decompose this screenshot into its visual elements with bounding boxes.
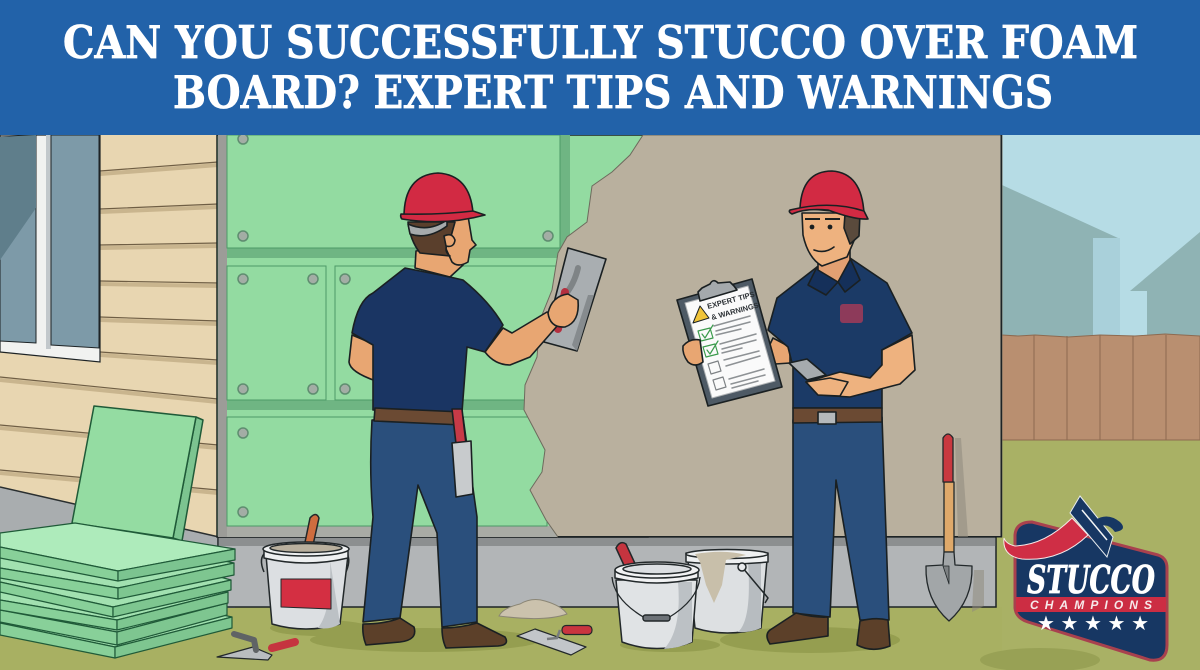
- neck: [818, 245, 850, 282]
- badge: [1015, 522, 1167, 660]
- front bucket with trowel handle: [612, 543, 700, 649]
- left arm: [349, 335, 376, 381]
- wooden fence: [1002, 334, 1200, 440]
- red swoosh: [1004, 518, 1088, 559]
- trowel mark: [1070, 496, 1123, 557]
- title text: BOARD? EXPERT TIPS AND WARNINGS: [173, 66, 1053, 119]
- hair: [844, 214, 860, 244]
- pants and boots: [767, 417, 890, 649]
- hand trowel left: [217, 634, 295, 660]
- right arm: [485, 312, 562, 365]
- window: [0, 135, 100, 362]
- eyes and mouth: [805, 218, 840, 229]
- logo: Stucco Champions: [1004, 496, 1167, 660]
- CHAMPIONS wordmark: CHAMPIONS: [1030, 598, 1152, 612]
- title text: [63, 16, 1138, 119]
- house siding: [0, 135, 235, 608]
- red band: [1016, 597, 1166, 612]
- checklist: [698, 316, 765, 390]
- polo shirt back: [352, 268, 503, 412]
- shovel shadow: [955, 438, 984, 612]
- face: [802, 213, 856, 266]
- pants and shoes: [363, 417, 506, 648]
- clipboard heading: & WARNINGS: [710, 301, 760, 322]
- clipboard heading: [706, 290, 760, 322]
- hard hat: [401, 173, 485, 222]
- stacked foam boards: [0, 523, 235, 658]
- worker plastering the wall: [349, 173, 606, 648]
- hand: [548, 294, 578, 327]
- raised arm: [760, 338, 790, 365]
- leaning foam board: [72, 406, 203, 541]
- stucco coat: [524, 135, 1002, 537]
- clipboard heading: EXPERT TIPS: [706, 290, 756, 311]
- tool belt: [374, 408, 462, 425]
- ear: [444, 235, 455, 246]
- neck: [415, 245, 463, 277]
- back bucket with drips: [686, 550, 768, 633]
- collar: [808, 258, 860, 295]
- belt: [793, 408, 882, 424]
- bucket with trowel handle: [261, 514, 349, 629]
- hair: [408, 222, 455, 256]
- belt trowel: [452, 409, 473, 497]
- foam board wall: [217, 134, 648, 537]
- hard hat: [789, 171, 868, 219]
- face: [440, 216, 476, 265]
- head band: [408, 220, 447, 236]
- stars: ★★★★★: [1037, 611, 1149, 635]
- clipboard: [677, 279, 782, 406]
- shovel: [926, 434, 972, 621]
- trowel on stucco: [544, 248, 606, 351]
- chest logo: [840, 304, 863, 323]
- warning icon: [693, 306, 709, 323]
- background: sky and yard: [0, 135, 1200, 670]
- inspector with clipboard: [677, 171, 915, 649]
- foundation: [218, 537, 996, 607]
- forearm and hand with phone: [789, 335, 915, 397]
- hand trowel right: [517, 626, 592, 655]
- title banner: [0, 0, 1200, 135]
- polo shirt: [768, 258, 912, 408]
- clipboard hand: [683, 340, 703, 365]
- sand pile: [499, 600, 567, 619]
